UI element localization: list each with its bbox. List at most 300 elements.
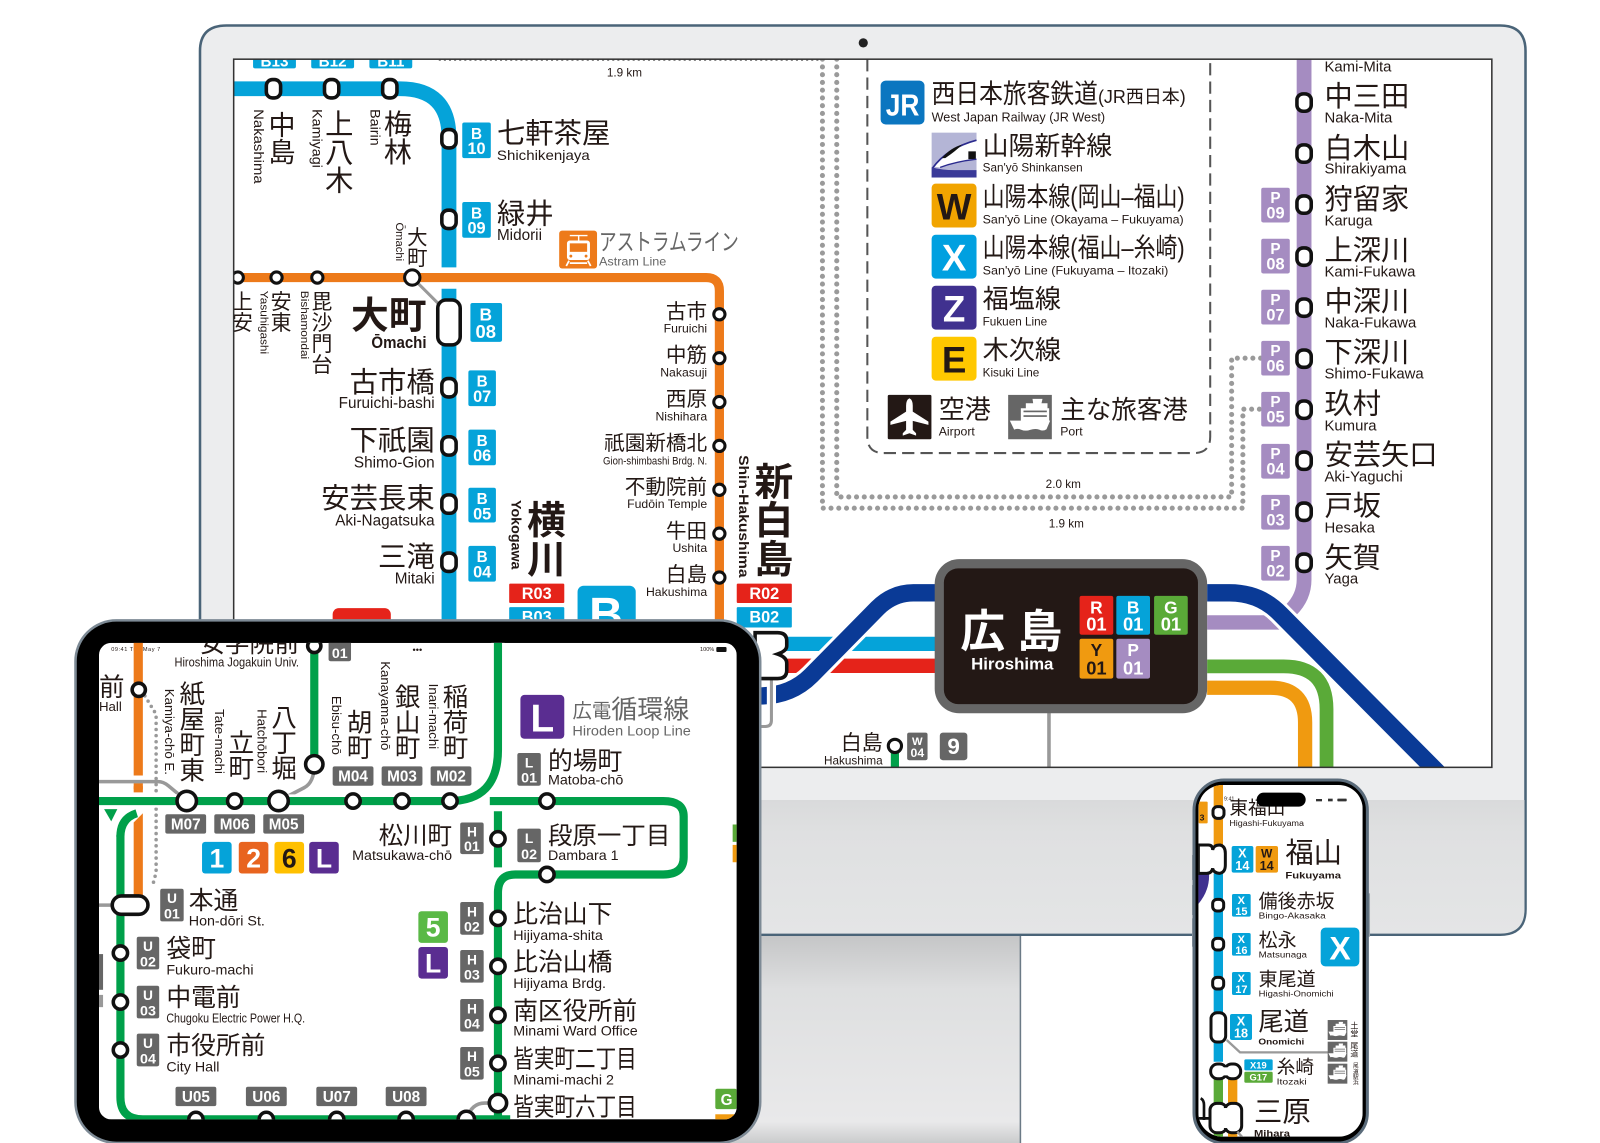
station names along line B: Ōmachi [371, 333, 427, 352]
purple line names: Shimo-Fukawa [1324, 367, 1424, 383]
purple line badges: P [1270, 446, 1281, 463]
horizontal station names: 女学院前 [200, 630, 299, 658]
Sanyo Shinkansen entry: San'yō Shinkansen [983, 161, 1083, 174]
purple line badges: 04 [1266, 460, 1285, 478]
Hiroden Loop Line label: L [531, 698, 554, 741]
grey station badges: 02 [464, 920, 480, 936]
Fukuen Line entry: Z [943, 288, 965, 329]
Sanyo Shinkansen entry [932, 132, 1112, 178]
Yokogawa and Shin-Hakushima: B03 [522, 608, 552, 626]
vertical M-line names: Kanayama-chō [378, 661, 393, 750]
phone status bar: 9:41 [1224, 797, 1234, 803]
station badges: X [1238, 934, 1246, 946]
purple line badges: 05 [1266, 408, 1285, 426]
Hiroshima station panel: Hiroshima [971, 654, 1054, 673]
station badges: X19 [1250, 1060, 1267, 1070]
Sanyo Line X entry: 山陽本線(福山–糸崎) [983, 233, 1185, 263]
purple line badges: P [1270, 497, 1281, 514]
horizontal station names: 比治山下 [513, 900, 612, 928]
B line badges: B [479, 304, 492, 324]
horizontal station names: Hon-dōri St. [189, 914, 265, 930]
horizontal station names: 前 [99, 674, 124, 702]
B line badges: B [471, 126, 482, 143]
vertical M-line names: Hatchōbori [255, 709, 270, 773]
grey connector [1047, 704, 1051, 767]
station badges: X [1238, 973, 1246, 985]
Hiroshima station panel: G [1164, 597, 1178, 617]
Hiroshima station panel [935, 559, 1207, 713]
purple line names: Shirakiyama [1324, 161, 1407, 177]
route number badges: L [316, 843, 332, 873]
iPhone [1192, 780, 1370, 1143]
Hiroden Loop Line label: 循環線 [611, 694, 689, 724]
Hiroden Loop Line label [520, 694, 691, 741]
vertical station names top left: 中島 [265, 111, 295, 165]
horizontal station names: 皆実町六丁目 [513, 1093, 637, 1121]
horizontal station names: 市役所前 [166, 1032, 265, 1060]
tablet screen [99, 630, 737, 1133]
legend box [867, 59, 1210, 453]
grey station badges: H [467, 904, 477, 919]
grey station badges: M02 [436, 769, 466, 786]
vertical station names top left: Bishamondai [298, 291, 310, 359]
Hakushima Sanyo station: 04 [911, 746, 924, 760]
status bar: 09:41 Tue May 7 [111, 647, 160, 653]
Astram line orange [234, 278, 719, 633]
horizontal station names: 袋町 [166, 935, 216, 963]
Hiroshima station panel: B [1127, 597, 1139, 617]
vertical station names top left: 上八木 [322, 109, 354, 194]
phone station names: Matsunaga [1259, 950, 1307, 960]
Yokogawa and Shin-Hakushima: B [589, 589, 623, 641]
dotted walking routes [439, 59, 1261, 531]
airport entry: Airport [939, 425, 975, 439]
purple line names: Kami-Fukawa [1324, 265, 1416, 281]
grey station badges: U [143, 988, 153, 1003]
tablet body [76, 620, 760, 1143]
purple line names: 中三田 [1324, 80, 1409, 112]
purple Fukuen fragment [1198, 873, 1209, 904]
grey station badges: M05 [269, 817, 299, 834]
Astram line names: 中筋 [666, 344, 707, 367]
purple line names: Naka-Fukawa [1324, 316, 1417, 332]
phone station names: 備後赤坂 [1259, 890, 1335, 912]
route number badges: 6 [282, 843, 297, 873]
grey station badges: U08 [392, 1089, 421, 1106]
purple line names: Kumura [1324, 419, 1377, 435]
Hiroshima station panel: 01 [1086, 657, 1107, 678]
station names along line B: 下祇園 [350, 425, 435, 457]
Astram line names: Furuichi [664, 322, 707, 336]
Astram line names: 西原 [666, 388, 707, 411]
B line badges: 10 [467, 140, 486, 158]
port entry [1008, 395, 1188, 439]
station badges: G17 [1250, 1073, 1267, 1083]
B line top badges: B12 [319, 53, 347, 70]
station names along line B: Shichikenjaya [497, 148, 590, 164]
JR West entry: (JR西日本) [1098, 86, 1186, 107]
horizontal station names: Chugoku Electric Power H.Q. [166, 1010, 305, 1025]
phone side buttons [1192, 855, 1370, 947]
dotted walking routes: 1.9 km [607, 67, 642, 80]
vertical station names top left: Kamiyagi [308, 109, 324, 168]
purple line badges [1261, 188, 1290, 581]
route number badges: 1 [209, 843, 224, 873]
horizontal station names: Fukuro-machi [166, 962, 254, 978]
phone screen [1198, 783, 1363, 1140]
station badges: X [1329, 930, 1351, 966]
vertical station names top left: Yasuhigashi [257, 291, 269, 354]
Astram line names: 牛田 [666, 520, 707, 543]
Hiroshima station panel: P [1127, 640, 1139, 660]
grey station badges: 01 [164, 906, 180, 922]
line segments [1218, 783, 1233, 1140]
green tram lines [99, 638, 684, 1133]
purple line names: 矢賀 [1324, 541, 1381, 573]
stand [612, 923, 1020, 1143]
grey station badges: 03 [464, 968, 480, 984]
Hiroshima station panel: 01 [1123, 614, 1143, 635]
port entry: Port [1060, 425, 1083, 439]
Hiroshima area fragments beside tablet [755, 633, 787, 727]
grey station badges [137, 633, 541, 1106]
Astram line names: 白島 [666, 564, 707, 587]
purple line badges: P [1270, 292, 1281, 309]
Yokogawa and Shin-Hakushima: Yokogawa [507, 500, 523, 571]
grey station badges: H [467, 1049, 477, 1064]
port entry: 主な旅客港 [1060, 396, 1188, 424]
port icons: 尾道 [1350, 1042, 1359, 1059]
phone station names: Higashi-Onomichi [1259, 989, 1334, 999]
purple line badges: P [1270, 394, 1281, 411]
station names along line B: 三滝 [378, 541, 435, 573]
Hakushima Sanyo station: 白島 [841, 732, 883, 755]
grey station badges: U [167, 891, 177, 906]
purple line names: Aki-Yaguchi [1324, 470, 1403, 486]
station badges [1230, 846, 1359, 1083]
Astram line names: Hakushima [646, 585, 707, 599]
vertical station names top left: 上安 [229, 291, 252, 333]
grey station badges: 03 [140, 1003, 156, 1019]
station badges: 14 [1260, 859, 1274, 873]
phone body [1194, 780, 1367, 1143]
green line [1207, 666, 1327, 776]
purple line names: 玖村 [1324, 387, 1381, 419]
route number badges: L [425, 948, 441, 978]
purple line badges: 09 [1266, 204, 1285, 222]
Sanyo Line W entry: San'yō Line (Okayama – Fukuyama) [983, 213, 1184, 226]
B line stations [266, 80, 460, 571]
Sanyo Line X entry: X [942, 237, 967, 278]
horizontal station names: 的場町 [548, 747, 622, 775]
Hiroshima station panel: 広島 [960, 606, 1074, 657]
route number badges: 5 [426, 913, 441, 943]
Hiroden Loop Line label: 広電 [572, 700, 611, 722]
grey port connector [1227, 1040, 1328, 1052]
horizontal station names: Minami Ward Office [513, 1024, 638, 1040]
Astram line stations [232, 270, 725, 583]
port icons: 土堂 [1350, 1021, 1359, 1038]
phone station names: Mihara [1254, 1129, 1291, 1139]
B line top badges [253, 60, 412, 68]
vertical station names top left: Nakashima [250, 109, 266, 184]
purple line stations [1297, 94, 1311, 571]
vertical M-line names: 稲荷町 [439, 684, 468, 760]
station names along line B: 安芸長束 [321, 483, 435, 515]
vertical M-line names: Tate-machi [212, 709, 227, 774]
vertical M-line names: Kamiya-chō E. [162, 689, 177, 775]
horizontal station names: Hall [99, 699, 122, 714]
purple line badges: 02 [1266, 563, 1285, 581]
Hakushima Sanyo station: Hakushima [824, 754, 883, 767]
station badges: 14 [1235, 859, 1249, 873]
purple line badges: 06 [1266, 357, 1285, 375]
right-edge fragments [99, 824, 737, 1120]
vertical M-line names: 立町 [225, 730, 253, 781]
phone station names [1229, 797, 1342, 1139]
grey station badges: U05 [182, 1089, 210, 1106]
Astram line names: Fudōin Temple [627, 497, 707, 511]
vertical station names top left: 安東 [268, 291, 292, 333]
Sanyo Line W entry: 山陽本線(岡山–福山) [983, 182, 1185, 212]
horizontal station names: 本通 [189, 887, 239, 915]
B line badges: 05 [473, 505, 491, 523]
vertical M-line names: 紙屋町東 [176, 681, 205, 783]
stations [112, 639, 554, 1128]
purple line badges: P [1270, 241, 1281, 258]
purple line names [1324, 59, 1437, 588]
blue line B [234, 89, 449, 633]
phone station names: Higashi-Fukuyama [1229, 819, 1305, 828]
Yokogawa and Shin-Hakushima [332, 456, 792, 628]
Hakushima Sanyo station: 9 [947, 734, 960, 759]
JR West entry: West Japan Railway (JR West) [932, 109, 1105, 124]
phone station names: Bingo-Akasaka [1259, 911, 1326, 921]
dotted walking routes: 2.0 km [1046, 478, 1081, 491]
horizontal station names: City Hall [166, 1059, 219, 1075]
B line badges: 09 [467, 220, 486, 238]
grey station badges: H [467, 1001, 477, 1016]
purple line badges: 07 [1266, 306, 1285, 324]
station badges: X [1238, 895, 1246, 907]
B line badges: B [477, 374, 488, 391]
station badges: X [1237, 1014, 1246, 1028]
grey station badges: 04 [140, 1051, 156, 1067]
grey station badges: 02 [140, 954, 156, 970]
Yokogawa and Shin-Hakushima: 新白島 [749, 461, 793, 578]
dotted walking routes: 1.9 km [1049, 518, 1084, 531]
station names along line B: Aki-Nagatsuka [335, 513, 435, 530]
horizontal station names: 南区役所前 [513, 997, 637, 1025]
JR West entry [881, 79, 1186, 124]
grey station badges: U07 [323, 1089, 351, 1106]
vertical M-line names: 銀山町 [391, 684, 420, 760]
Fukuen Line entry [932, 284, 1061, 330]
Yokogawa and Shin-Hakushima: B02 [749, 608, 779, 626]
station names along line B: 緑井 [497, 198, 554, 230]
status bar [112, 647, 727, 652]
status bar: ••• [413, 645, 422, 655]
Hiroshima station panel: R [1090, 597, 1103, 617]
station names along line B [321, 118, 610, 588]
purple line names: 戸坂 [1324, 489, 1381, 521]
purple line names: 上深川 [1324, 234, 1409, 266]
horizontal station names: 皆実町二丁目 [513, 1045, 637, 1073]
B line badges: 07 [473, 388, 491, 406]
monitor body [200, 26, 1526, 935]
B line top badges: B13 [260, 53, 289, 70]
Astram line names: 祇園新橋北 [604, 432, 708, 455]
station names along line B: 七軒茶屋 [497, 118, 610, 150]
horizontal station names: Matsukawa-chō [352, 848, 452, 864]
airport entry: 空港 [939, 394, 991, 424]
Astram line names: Gion-shimbashi Brdg. N. [603, 455, 707, 467]
vertical station names top left: Ōmachi [393, 222, 405, 261]
cyan and red lines [760, 644, 939, 666]
Astram line label: Astram Line [599, 254, 667, 268]
phone station names: 東尾道 [1259, 969, 1316, 991]
phone station names: 三原 [1254, 1097, 1311, 1129]
phone station names: 尾道 [1258, 1009, 1309, 1037]
Astram line names: Nakasuji [660, 366, 707, 380]
horizontal station names: 中電前 [166, 984, 241, 1012]
vertical M-line names: Ebisu-chō [329, 696, 344, 755]
vertical M-line names: 八丁堀 [268, 704, 296, 781]
station badges: 17 [1235, 984, 1247, 996]
Sanyo Line W entry [932, 182, 1185, 228]
B line badges: B [477, 433, 488, 450]
B line badges: B [477, 549, 488, 566]
horizontal station names: Minami-machi 2 [513, 1073, 614, 1089]
phone station names: Onomichi [1258, 1037, 1304, 1047]
dark blue line [760, 593, 1441, 776]
purple line badges: 08 [1266, 255, 1285, 273]
vertical station names top left: 大町 [403, 226, 427, 267]
grey station badges: 04 [464, 1017, 480, 1033]
grey station badges: U [143, 1036, 153, 1051]
grey station badges: U06 [252, 1089, 280, 1106]
route number badges: 2 [246, 843, 261, 873]
orange Astram segments [134, 638, 143, 898]
Sanyo Line X entry: San'yō Line (Fukuyama – Itozaki) [983, 264, 1168, 277]
vertical station names top left: Bairin [366, 109, 382, 146]
phone station names: Itozaki [1277, 1076, 1307, 1086]
Kisuki Line entry: E [942, 339, 966, 380]
B line badges: 06 [473, 447, 491, 465]
grey station badges: 02 [521, 847, 537, 863]
purple line names: Naka-Mita [1324, 110, 1393, 126]
Hiroshima station panel: 01 [1086, 614, 1107, 635]
grey connectors [99, 764, 498, 1119]
Hiroshima station panel: Y [1091, 640, 1103, 660]
Yokogawa and Shin-Hakushima: Shin-Hakushima [735, 455, 751, 579]
station names along line B: 大町 [351, 295, 427, 337]
dynamic island [1257, 793, 1306, 807]
Kisuki Line entry: 木次線 [983, 335, 1061, 365]
vertical station names top left: 梅林 [380, 109, 411, 165]
iPad tablet [76, 620, 760, 1143]
purple line names: 中深川 [1324, 285, 1409, 317]
Fukuen Line entry: Fukuen Line [983, 316, 1047, 329]
purple line badges: 03 [1266, 512, 1285, 530]
purple line names: Kami-Mita [1324, 59, 1392, 75]
purple line names: 下深川 [1324, 336, 1409, 368]
JR West entry: 西日本旅客鉄道 [932, 79, 1098, 109]
grey station badges: H [467, 825, 477, 840]
phone station names: 松永 [1259, 930, 1297, 952]
Hiroshima station panel: 01 [1123, 657, 1143, 678]
port icons: 尾道駅浜 [1351, 1063, 1358, 1087]
station badges: 15 [1235, 906, 1247, 918]
station names along line B: Mitaki [395, 571, 435, 588]
purple line names: Hesaka [1324, 521, 1376, 537]
Astram line names [603, 300, 708, 599]
horizontal station names: Dambara 1 [548, 848, 619, 864]
port icons [1328, 1020, 1359, 1087]
grey station badges: 01 [521, 771, 537, 787]
purple line P [1207, 51, 1304, 622]
edge badge: 3 [1200, 813, 1205, 823]
Sanyo Shinkansen entry: 山陽新幹線 [983, 132, 1112, 161]
webcam [859, 38, 868, 47]
station badges: 16 [1235, 945, 1247, 957]
Fukuen Line entry: 福塩線 [983, 284, 1061, 314]
phone station names: Fukuyama [1285, 870, 1342, 880]
station badges: X [1238, 846, 1247, 860]
Hiroden Loop Line label: Hiroden Loop Line [572, 724, 691, 740]
grey station badges: L [525, 831, 533, 846]
vertical M-line names: 胡町 [343, 709, 371, 760]
Sanyo Line W entry: W [937, 186, 972, 227]
Hakushima Sanyo station [824, 732, 967, 767]
purple line names: 白木山 [1324, 132, 1409, 164]
horizontal station names [99, 630, 670, 1121]
station names along line B: Shimo-Gion [354, 454, 435, 471]
Yokogawa and Shin-Hakushima: R03 [522, 585, 552, 603]
route number badges [202, 842, 448, 979]
grey station badges: 01 [464, 839, 480, 855]
grey station badges: U [143, 939, 153, 954]
grey station badges: M07 [171, 817, 201, 834]
B line badges: B [471, 205, 482, 222]
grey station badges: H [467, 952, 477, 967]
purple line badges: P [1270, 548, 1281, 565]
station badges: 18 [1234, 1027, 1248, 1041]
right-edge fragments: G [721, 1092, 732, 1109]
edge badge [1199, 802, 1208, 823]
horizontal station names: 松川町 [379, 822, 452, 850]
B line badges: 08 [476, 321, 496, 342]
phone station names: 糸崎 [1277, 1056, 1314, 1077]
B line badges: 04 [473, 564, 491, 582]
vertical station names top left [229, 109, 427, 375]
vertical station names top left: 毘沙門台 [309, 291, 332, 375]
grey station badges: M06 [220, 817, 250, 834]
purple line badges: P [1270, 343, 1281, 360]
Astram line label: アストラムライン [599, 229, 739, 255]
dotted walking link [145, 696, 156, 888]
horizontal station names: Hiroshima Jogakuin Univ. [174, 654, 299, 669]
Astram line names: Nishihara [655, 409, 707, 423]
Yokogawa and Shin-Hakushima: 横川 [521, 500, 566, 578]
station names along line B: Furuichi-bashi [339, 395, 435, 412]
horizontal station names: 比治山橋 [513, 948, 613, 976]
station names along line B: 古市橋 [350, 367, 435, 399]
Astram line label [559, 229, 739, 268]
screen frame [234, 59, 1492, 767]
Kisuki Line entry [932, 335, 1061, 381]
horizontal station names: Hijiyama Brdg. [513, 976, 606, 992]
